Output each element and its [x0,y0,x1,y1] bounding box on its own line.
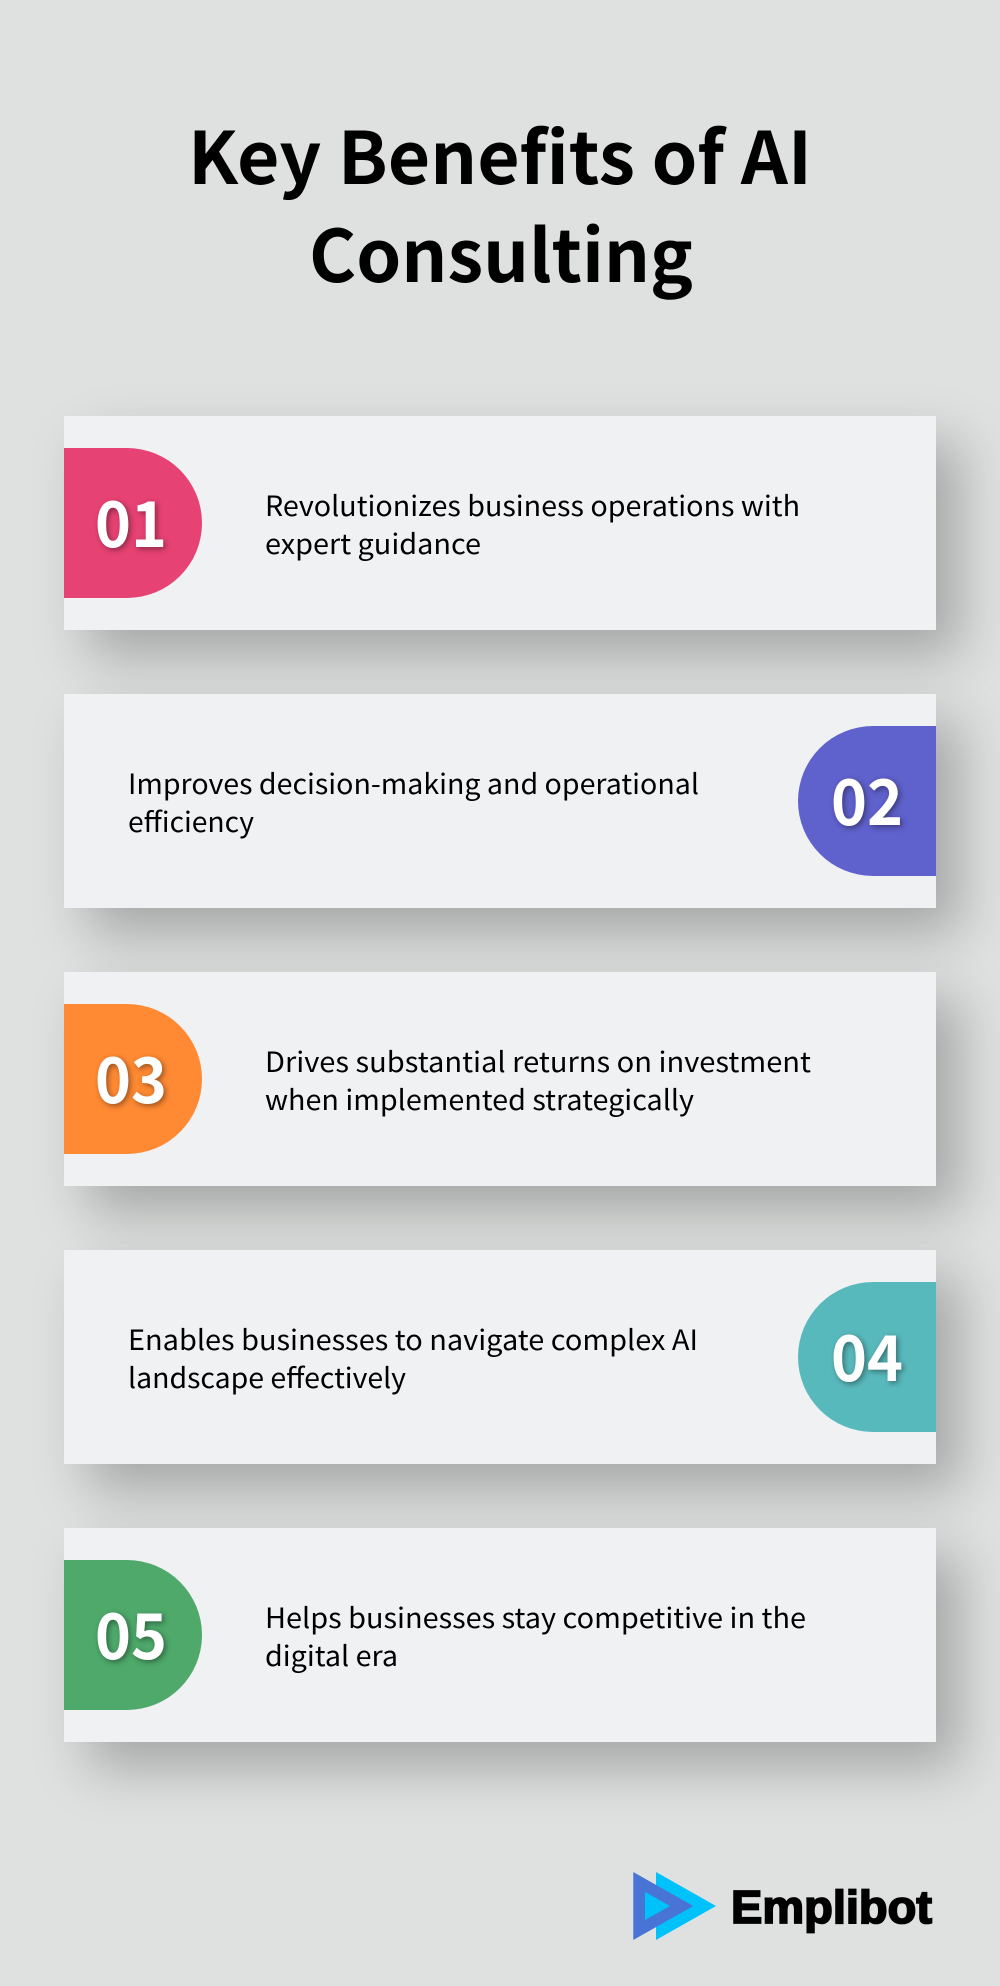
badge 02 [798,726,936,876]
logo: Emplibot: Emplibot [731,1881,932,1933]
panel text and number 03: Drives substantial returns on investment [265,1041,811,1081]
panel text and number 02 [128,753,905,844]
panel: benefit 03 [64,972,936,1186]
panel text and number 02: Improves decision-making and operational [128,763,699,803]
panel text and number 01: 01 [95,475,167,566]
panel: benefit 02 [64,694,936,908]
badge 03 [64,1004,202,1154]
panel text and number 03: 03 [95,1031,167,1122]
panel text and number 03 [95,1031,811,1122]
title: Consulting [309,198,693,303]
panel text and number 02: efficiency [128,801,254,841]
badge 04 [798,1282,936,1432]
panel text and number 05: Helps businesses stay competitive in the [265,1597,806,1637]
panel text and number 04: Enables businesses to navigate complex AI [128,1319,698,1359]
panel text and number 04: 04 [831,1309,903,1400]
panel text and number 05: digital era [265,1635,398,1675]
panel text and number 03: when implemented strategically [265,1079,694,1119]
panel: benefit 01 [64,416,936,630]
panel text and number 05: 05 [95,1587,167,1678]
panel: benefit 04 [64,1250,936,1464]
title: Key Benefits of AI [188,100,812,205]
panel: benefit 05 [64,1528,936,1742]
panel text and number 01 [95,475,800,566]
badge 05 [64,1560,202,1710]
badge 01 [64,448,202,598]
panel text and number 04 [128,1309,906,1400]
title [188,100,812,303]
panel text and number 04: landscape effectively [128,1357,406,1397]
panel text and number 02: 02 [831,753,903,844]
panel text and number 01: Revolutionizes business operations with [265,485,800,525]
panel text and number 01: expert guidance [265,523,481,563]
panel text and number 05 [95,1587,806,1678]
